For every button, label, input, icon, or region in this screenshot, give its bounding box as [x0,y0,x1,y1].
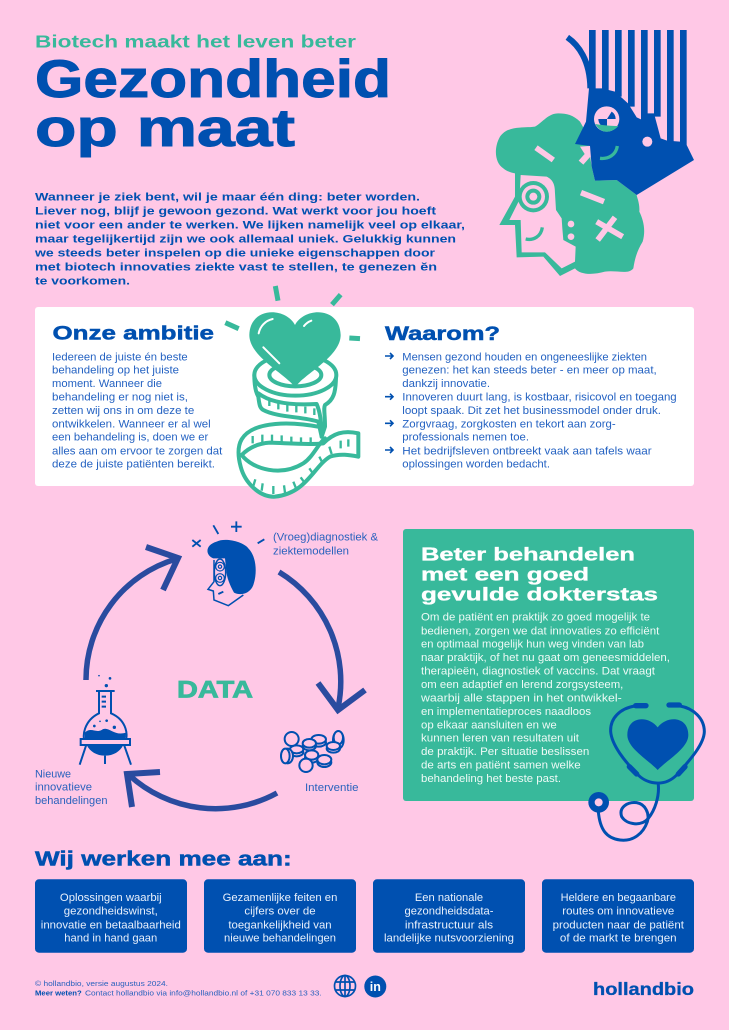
list: waarom: dankzij innovatie. [402,378,490,390]
icon: doctor head [192,521,264,606]
arrow: diagnosis to intervention [279,572,365,710]
card: oplossingen: gezondheidswinst, [64,906,158,918]
text: behandelen body: kunnen leren van resultaten uit [421,733,579,745]
list: waarom: Innoveren duurt lang, is kostbaar, risicovol en toegang [402,392,677,404]
label: nieuwe behandelingen: Nieuwe [35,768,71,780]
text: behandelen body: therapieën, diagnostiek of vaccins. Dat vraagt [421,665,655,677]
card: feiten en cijfers [204,879,356,953]
text: behandelen body: de arts en patiënt samen welke [421,759,581,771]
intro text: Liever nog, blijf je gewoon gezond. Wat werkt voor jou hoeft [35,205,436,217]
card: routes: of de markt te brengen [560,933,677,945]
icon: heart with measuring tape [225,286,360,497]
list: waarom [385,351,677,471]
text: behandelen body: bedienen, zorgen we dat innovaties zo efficiënt [421,625,659,637]
heading: beter behandelen: met een goed [421,564,589,585]
text: ambitie: moment. Wanneer die [52,378,162,390]
title [35,50,391,158]
card: gezondheidsdata: gezondheidsdata- [404,906,494,918]
heading: waarom: Waarom? [385,323,500,345]
text: ambitie [52,351,222,471]
label: nieuwe behandelingen: behandelingen [35,795,108,807]
text: behandelen body: waarbij alle stappen in het ontwikkel- [420,692,622,704]
card: routes: routes om innovatieve [562,906,674,918]
panel: ambitie and waarom [35,307,694,486]
card: oplossingen: Oplossingen waarbij [60,892,162,904]
text: behandelen body [420,612,670,785]
icon: globe [334,976,356,996]
label: vroegdiagnostiek: (Vroeg)diagnostiek & [273,532,378,544]
title: op maat [35,99,295,158]
blue head [567,30,694,195]
text: behandelen body: Om de patiënt en praktijk zo goed mogelijk te [421,612,650,624]
icon: flask [80,675,131,765]
text: behandelen body: om een adaptief en lerend zorgsysteem, [421,679,623,691]
footer text: Contact hollandbio via info@hollandbio.nl of +31 070 833 13 33. [85,989,322,998]
heading: wij werken mee aan: Wij werken mee aan: [35,849,292,871]
footer text [35,979,322,998]
intro text: we steeds beter inspelen op die unieke eigenschappen door [34,247,436,259]
card: oplossingen: innovatie en betaalbaarheid [41,919,181,931]
text: ambitie: Iedereen de juiste én beste [52,351,188,363]
logo: hollandbio: hollandbio [593,979,694,999]
arrow: new treatments to diagnosis [86,547,178,680]
icon: linkedin [364,976,386,998]
intro text: te voorkomen. [35,275,130,287]
list: waarom: loopt spaak. Dit zet het businessmodel onder druk. [402,405,661,417]
text: behandelen body: behandeling het beste past. [421,773,561,785]
card: oplossingen [35,879,187,953]
label: nieuwe behandelingen [35,768,108,807]
footer text: Meer weten? [35,989,82,998]
card: feiten en cijfers: Gezamenlijke feiten en [223,892,337,904]
list: waarom: oplossingen worden bedacht. [402,459,550,471]
arrow: intervention to new treatments [127,772,277,809]
text: ambitie: behandeling er nog niet is, [52,392,188,404]
text: ambitie: een behandeling is, doen we er [52,432,209,444]
footer text: © hollandbio, versie augustus 2024. [35,979,168,988]
icon: pills [281,731,344,772]
text: ambitie: deze de juiste patiënten bereikt. [52,459,215,471]
card: routes: producten naar de patiënt [553,919,684,931]
card: gezondheidsdata [373,879,525,953]
text: behandelen body: en optimaal mogelijk hun weg vinden van lab [421,639,644,651]
subtitle: Biotech maakt het leven beter [35,32,356,52]
label: interventie: Interventie [305,782,359,794]
label: data: DATA [177,677,253,703]
text: ambitie: alles aan om ervoor te zorgen dat [52,445,222,457]
intro text: niet voor een ander te werken. We lijken namelijk veel op elkaar, [35,219,465,231]
card: gezondheidsdata: Een nationale [415,892,483,904]
heading: beter behandelen [421,544,658,605]
list: waarom: professionals nemen toe. [402,432,529,444]
label: vroegdiagnostiek: ziektemodellen [273,545,349,557]
text: ambitie: behandeling op het juiste [52,365,179,377]
list: waarom: Het bedrijfsleven ontbreekt vaak aan tafels waar [402,445,652,457]
card: oplossingen: hand in hand gaan [64,933,157,945]
text: behandelen body: en implementatieproces naadloos [421,706,592,718]
cycle diagram [35,521,378,809]
heading: beter behandelen: Beter behandelen [421,544,635,565]
intro text [34,191,465,287]
card: feiten en cijfers: toegankelijkheid van [228,919,332,931]
card: routes: Heldere en begaanbare [561,892,676,904]
list: waarom: Zorgvraag, zorgkosten en tekort aan zorg- [402,418,616,430]
label: vroegdiagnostiek [273,532,378,557]
text: ambitie: ontwikkelen. Wanneer er al wel [52,418,211,430]
card: gezondheidsdata: infrastructuur als [405,919,493,931]
intro text: maar tegelijkertijd zijn we ook allemaal uniek. Gelukkig kunnen [35,233,456,245]
text: ambitie: zetten wij ons in om deze te [52,405,194,417]
card: gezondheidsdata: landelijke nutsvoorziening [384,933,514,945]
text: behandelen body: op elkaar aansluiten en we [421,719,557,731]
panel: beter behandelen [403,529,694,801]
list: waarom: Mensen gezond houden en ongeneeslijke ziekten [402,351,647,363]
text: behandelen body: de praktijk. Per situatie beslissen [421,746,589,758]
card: routes [542,879,694,953]
heading: onze ambitie: Onze ambitie [52,322,214,344]
intro text: Wanneer je ziek bent, wil je maar één ding: beter worden. [35,191,420,203]
card: feiten en cijfers: nieuwe behandelingen [224,933,336,945]
heading: beter behandelen: gevulde dokterstas [421,584,658,605]
card: feiten en cijfers: cijfers over de [244,906,316,918]
intro text: met biotech innovaties ziekte vast te stellen, te genezen ĕn [35,261,437,273]
icon: linkedin: in [370,980,381,994]
list: waarom: genezen: het kan steeds beter - en meer op maat, [402,365,657,377]
label: nieuwe behandelingen: innovatieve [35,782,92,794]
illustration: two heads [496,30,694,276]
title: Gezondheid [35,50,391,109]
text: behandelen body: naar praktijk, of het nu gaat om geneesmiddelen, [421,652,670,664]
green head [496,113,644,276]
icon: stethoscope with heart [588,705,704,840]
